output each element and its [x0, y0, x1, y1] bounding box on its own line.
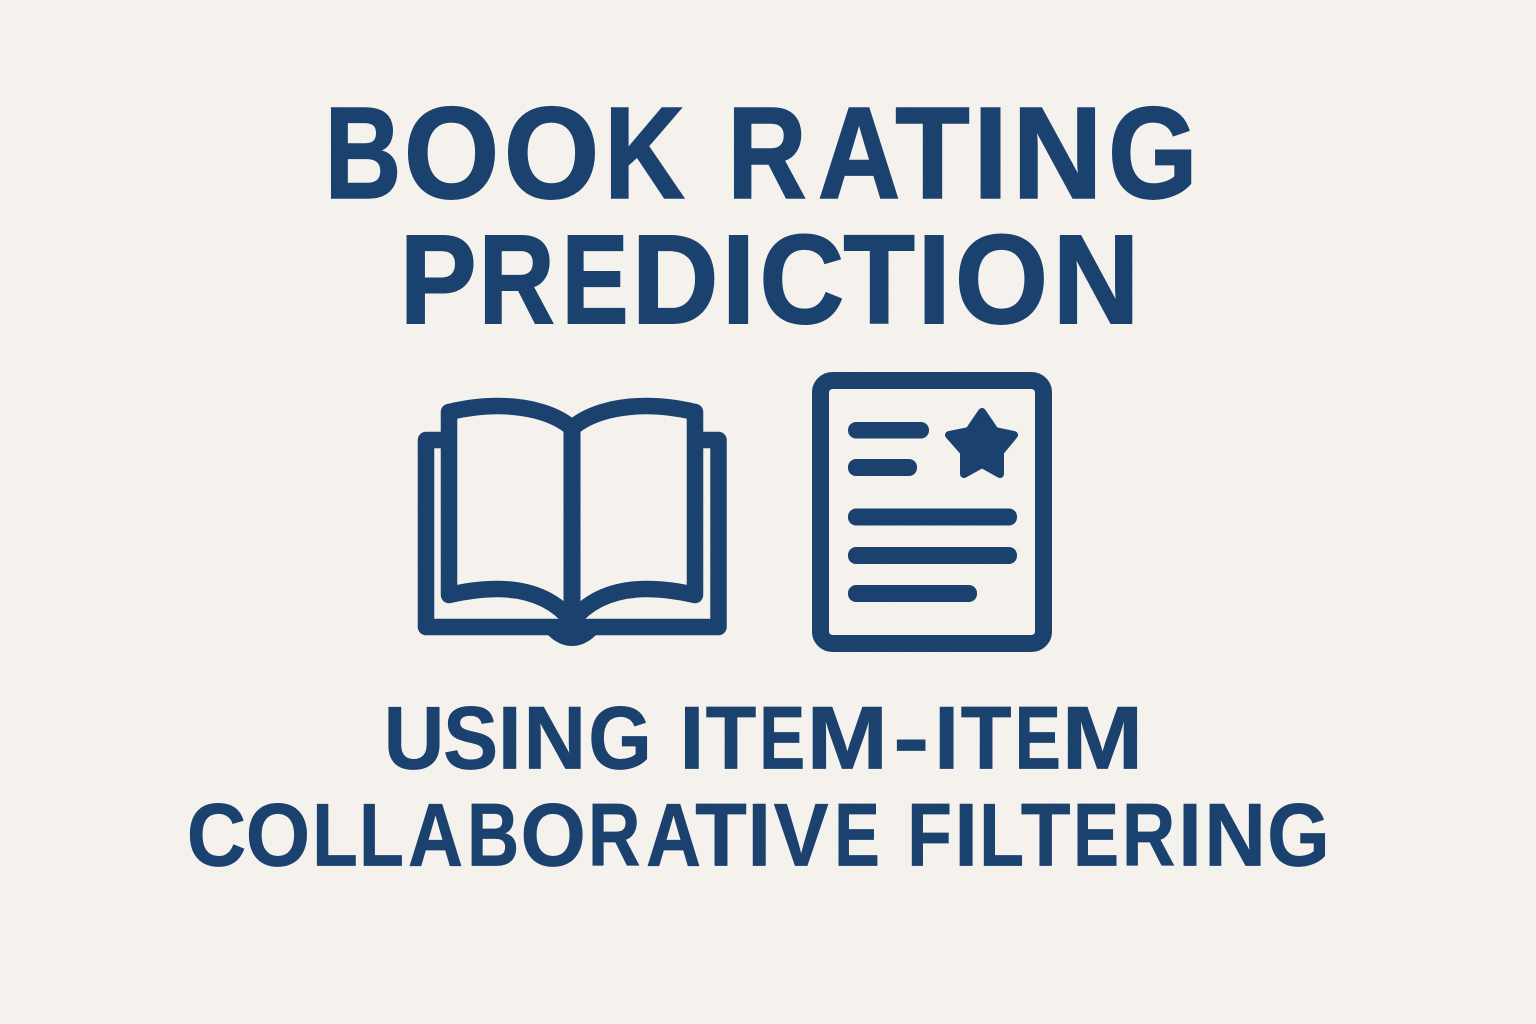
subtitle line: using item-item: N: [524, 688, 586, 788]
title line: prediction: E: [562, 209, 628, 350]
subtitle line: collaborative filtering: A: [408, 785, 463, 885]
subtitle line: collaborative filtering: A: [646, 785, 701, 885]
title line: book rating: G: [1108, 80, 1198, 226]
title line: prediction: C: [760, 209, 844, 350]
subtitle line: collaborative filtering: E: [834, 785, 880, 885]
subtitle line: using item-item: M: [1062, 688, 1143, 788]
title line: prediction: I: [722, 209, 755, 350]
subtitle: [187, 688, 1330, 885]
title line: prediction: I: [918, 209, 951, 350]
title line: book rating: R: [728, 80, 806, 226]
subtitle line: collaborative filtering: O: [246, 785, 310, 885]
title line: book rating: O: [404, 80, 499, 226]
title line: book rating: K: [604, 80, 684, 226]
title line: prediction: O: [955, 209, 1048, 350]
subtitle line: collaborative filtering: R: [1122, 785, 1175, 885]
subtitle line: collaborative filtering: L: [359, 785, 404, 885]
subtitle line: collaborative filtering: T: [1021, 785, 1070, 885]
subtitle line: using item-item: G: [588, 688, 652, 788]
subtitle line: using item-item: I: [679, 688, 704, 788]
icon: open book: [426, 406, 718, 646]
left page: [449, 406, 572, 621]
book back cover: [426, 440, 718, 627]
title: [325, 80, 1198, 350]
title line: book rating: N: [1012, 80, 1102, 226]
icon: rated document: [820, 380, 1044, 644]
title line: book rating: T: [895, 80, 970, 226]
subtitle line: using item-item: I: [934, 688, 959, 788]
title line: prediction: N: [1053, 209, 1140, 350]
document text lines: [848, 422, 1017, 602]
subtitle line: using item-item: M: [807, 688, 888, 788]
title line: book rating: O: [504, 80, 599, 226]
subtitle line: using item-item: E: [759, 688, 805, 788]
document frame: [820, 380, 1044, 644]
subtitle line: using item-item: -: [893, 688, 929, 788]
book spine bulge: [546, 633, 598, 646]
subtitle line: using item-item: U: [384, 688, 444, 788]
subtitle line: collaborative filtering: B: [467, 785, 519, 885]
title line: prediction: P: [400, 209, 477, 350]
title line: book rating: I: [973, 80, 1008, 226]
subtitle line: using item-item: I: [498, 688, 522, 788]
subtitle line: collaborative filtering: I: [954, 785, 978, 885]
subtitle line: using item-item: S: [443, 688, 498, 788]
title line: book rating: A: [818, 80, 900, 226]
right page: [572, 406, 695, 621]
subtitle line: collaborative filtering: L: [979, 785, 1024, 885]
title line: prediction: T: [844, 209, 915, 350]
subtitle line: collaborative filtering: V: [774, 785, 828, 885]
subtitle line: collaborative filtering: I: [1178, 785, 1202, 885]
title line: prediction: D: [632, 209, 718, 350]
subtitle line: collaborative filtering: L: [312, 785, 358, 885]
title line: book rating: B: [325, 80, 401, 226]
book centre fold: [564, 428, 580, 636]
subtitle line: collaborative filtering: G: [1267, 785, 1330, 885]
subtitle line: collaborative filtering: R: [588, 785, 640, 885]
subtitle line: collaborative filtering: T: [695, 785, 747, 885]
title line: prediction: R: [479, 209, 555, 350]
subtitle line: collaborative filtering: C: [187, 785, 246, 885]
subtitle line: collaborative filtering: N: [1204, 785, 1266, 885]
subtitle line: using item-item: T: [706, 688, 756, 788]
subtitle line: collaborative filtering: I: [748, 785, 771, 885]
subtitle line: collaborative filtering: F: [907, 785, 952, 885]
subtitle line: using item-item: T: [961, 688, 1011, 788]
subtitle line: collaborative filtering: E: [1073, 785, 1119, 885]
subtitle line: collaborative filtering: O: [521, 785, 586, 885]
star rating: [949, 412, 1014, 474]
subtitle line: using item-item: E: [1015, 688, 1061, 788]
